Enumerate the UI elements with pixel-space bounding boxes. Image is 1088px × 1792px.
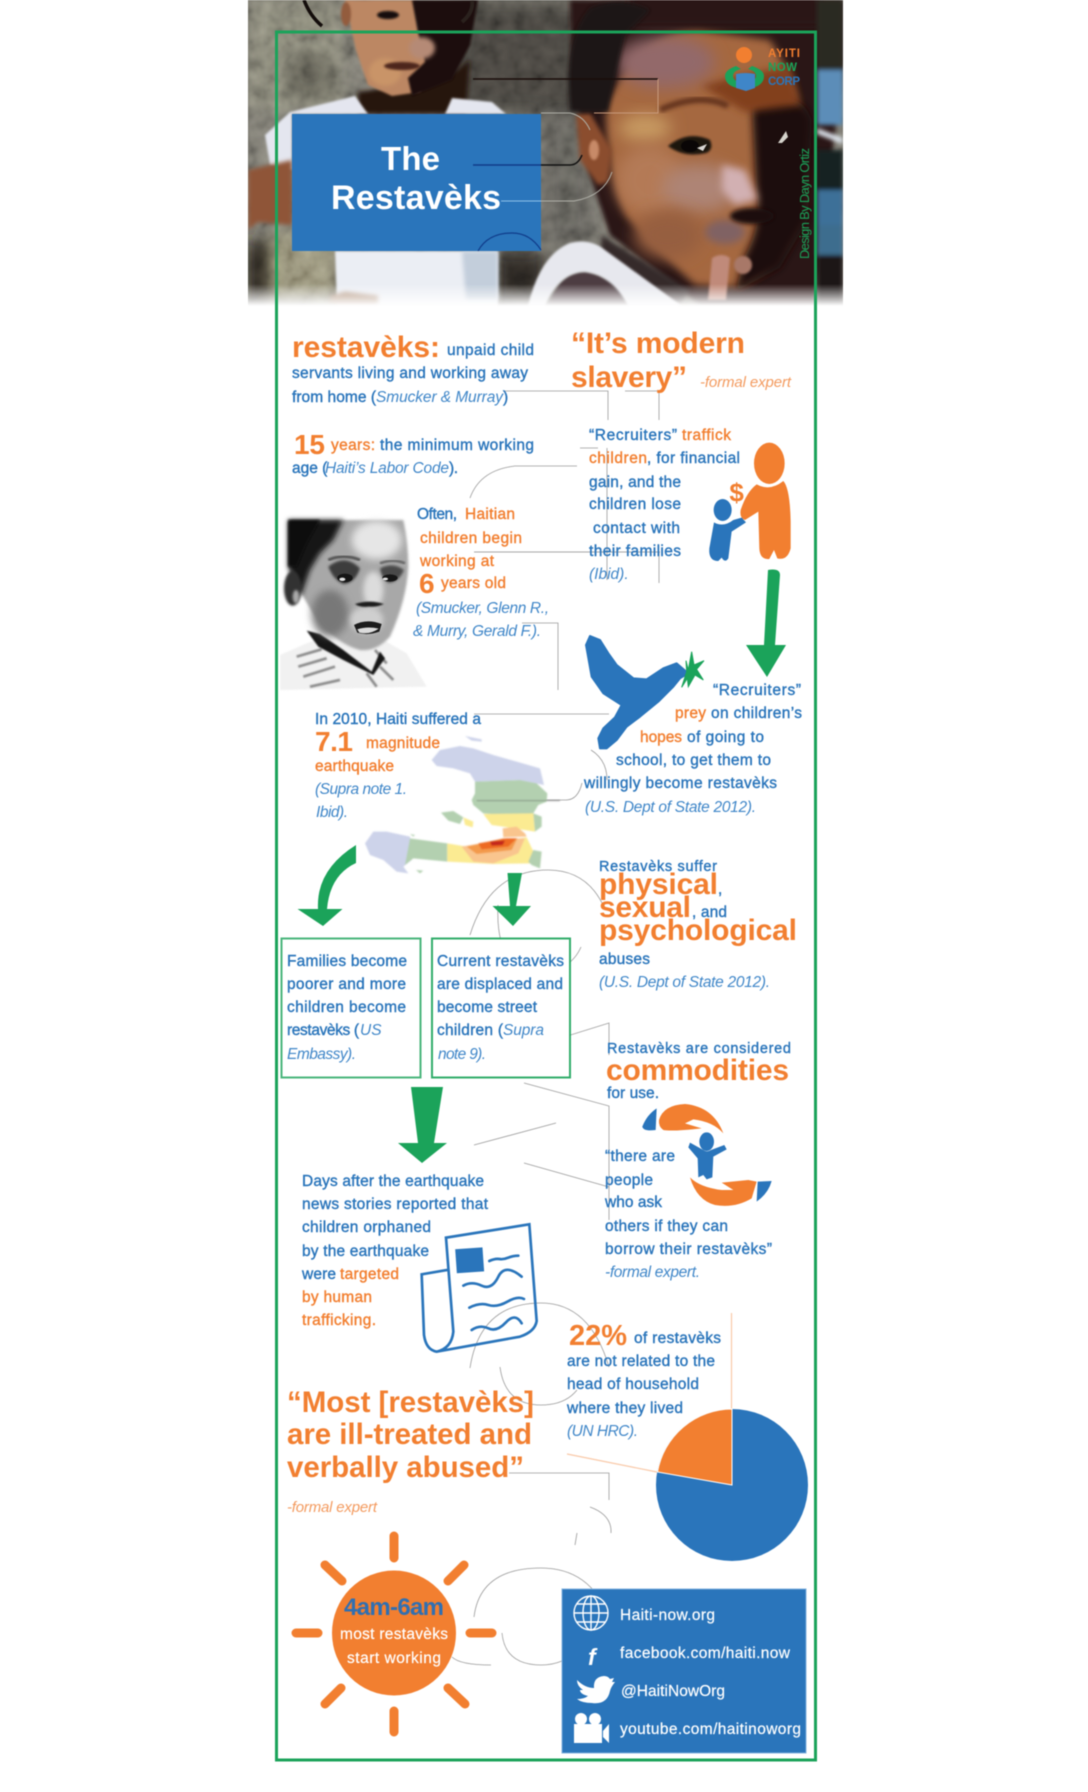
title text [331, 140, 501, 217]
text: abuses: , and [692, 904, 727, 921]
text: days after the earthquake: targeted [340, 1266, 399, 1283]
text: abuses: physical [599, 868, 718, 901]
right child face [568, 0, 843, 306]
stray connector lines [452, 391, 660, 1665]
definition: restavèks [292, 331, 534, 406]
definition: restavèks: ) [503, 389, 508, 406]
icon: video camera [574, 1713, 609, 1743]
text: abuses: sexual [599, 891, 691, 924]
text: days after the earthquake: children orphaned [302, 1219, 431, 1236]
text: 2010 earthquake: (Supra note 1. [315, 781, 407, 798]
title box [292, 114, 541, 251]
text: recruiters traffic children: (Ibid). [589, 566, 629, 583]
box: current restaveks displaced: become street [437, 999, 538, 1016]
text: days after the earthquake: trafficking. [302, 1312, 376, 1329]
text: recruiters traffic children: “Recruiters” [589, 427, 677, 444]
text: recruiters traffic children: traffick [682, 427, 731, 444]
text: 22 percent: of restavèks [634, 1330, 721, 1347]
designer credit: Design By Dayn Ortiz [797, 148, 812, 259]
text: recruiters prey on hopes: willingly become restavèks [583, 775, 777, 792]
quote: modern slavery: slavery” [571, 361, 687, 394]
hero stray lines [473, 79, 658, 201]
left child face [304, 0, 478, 114]
quote: ill-treated: -formal expert [287, 1499, 378, 1516]
contact panel [562, 1589, 806, 1753]
text: children begin working at 6: (Smucker, Glenn R., [416, 600, 549, 617]
stat: 15 years: Haiti’s Labor Code [325, 460, 449, 477]
curved arrow to families box [298, 845, 356, 926]
text: recruiters traffic children: , for financial [647, 450, 740, 467]
text: days after the earthquake: by human [302, 1289, 372, 1306]
logo: Ayiti Now Corp: AYITI [768, 48, 800, 60]
text: days after the earthquake: news stories reported that [302, 1196, 489, 1213]
box: current restaveks displaced: children ( [437, 1022, 504, 1039]
text: abuses: Restavèks suffer [599, 859, 717, 875]
text: 2010 earthquake: earthquake [315, 758, 394, 775]
contact links: youtube.com/haitinoworg [620, 1721, 801, 1738]
definition: restavèks: restavèks: [292, 331, 440, 364]
text: 22 percent: where they lived [566, 1400, 683, 1417]
logo: Ayiti Now Corp: CORP [768, 76, 800, 88]
text: abuses: abuses [599, 951, 650, 968]
quote: modern slavery: -formal expert [700, 374, 792, 391]
box: current restaveks displaced [432, 938, 570, 1078]
text: 2010 earthquake: Ibid). [316, 804, 348, 821]
box: current restaveks displaced: are displaced and [437, 976, 563, 993]
contact links: @HaitiNowOrg [621, 1683, 725, 1700]
quote: ill-treated: “Most [restavèks] [287, 1386, 534, 1419]
box: families become poorer [282, 938, 420, 1078]
text: 2010 earthquake: magnitude [366, 735, 440, 752]
icon: adult paying for child [709, 443, 791, 561]
icon: adult paying for child: $ [729, 478, 744, 508]
pie chart: 22 percent [567, 1313, 808, 1561]
text: commodities: commodities [606, 1054, 789, 1087]
hero photo: two children [248, 0, 843, 306]
text: recruiters prey on hopes: “Recruiters” [713, 682, 801, 699]
sun: working hours [296, 1536, 492, 1732]
quote: modern slavery [571, 327, 792, 394]
text: children begin working at 6: years old [441, 575, 506, 592]
text: days after the earthquake [301, 1173, 489, 1329]
text: children begin working at 6: 6 [419, 568, 435, 599]
stat: 15 years: ). [449, 460, 458, 477]
text: recruiters prey on hopes: hopes [640, 729, 682, 746]
title text: The [381, 140, 440, 177]
text: 2010 earthquake [315, 711, 481, 821]
box: families become poorer: Embassy). [287, 1046, 356, 1063]
box: families become poorer: children become [287, 999, 406, 1016]
text: children begin working at 6: working at [419, 553, 495, 570]
text: 2010 earthquake: 7.1 [315, 726, 353, 757]
text: days after the earthquake: by the earthquake [302, 1243, 429, 1260]
icon: facebook: f [588, 1644, 598, 1670]
stat: 15 years: 15 [294, 429, 325, 460]
text: commodities [606, 1041, 791, 1102]
text: days after the earthquake: Days after the earthquake [302, 1173, 484, 1190]
icon: globe [574, 1596, 608, 1630]
box: current restaveks displaced: note 9). [438, 1046, 486, 1063]
child portrait photo [280, 520, 427, 690]
quote: ill-treated: are ill-treated and [287, 1418, 532, 1451]
text: recruiters prey on hopes: of going to [687, 729, 764, 746]
text: recruiters traffic children: their families [589, 543, 681, 560]
text: recruiters traffic children: children [589, 450, 647, 467]
logo: Ayiti Now Corp [725, 47, 800, 91]
quote: borrow restaveks: “there are [605, 1148, 675, 1165]
text: abuses: (U.S. Dept of State 2012). [599, 974, 770, 991]
quote: borrow restaveks: others if they can [605, 1218, 728, 1235]
quote: borrow restaveks: borrow their restavèks” [605, 1241, 772, 1258]
text: recruiters traffic children: contact with [593, 520, 680, 537]
box: families become poorer: Families become [287, 953, 407, 970]
text: recruiters prey on hopes: school, to get them to [616, 752, 771, 769]
large arrow to news text [398, 1087, 447, 1163]
text: 22 percent: (UN HRC). [567, 1423, 638, 1440]
text: abuses: psychological [599, 914, 797, 947]
icon: newspaper [422, 1224, 537, 1352]
text: children begin working at 6: & Murry, Gerald F.). [413, 623, 541, 640]
outer frame [276, 32, 816, 1760]
text: recruiters traffic children: children lose [589, 496, 681, 513]
contact links: Haiti-now.org [620, 1607, 715, 1624]
text: 2010 earthquake: In 2010, Haiti suffered a [315, 711, 481, 728]
quote: borrow restaveks: people [605, 1172, 653, 1189]
box: current restaveks displaced: Supra [503, 1022, 544, 1039]
infographic: The Restavèks [247, 0, 844, 1762]
text: commodities: Restavèks are considered [607, 1041, 791, 1057]
sun: working hours: most restavèks [340, 1626, 448, 1643]
logo: Ayiti Now Corp: NOW [768, 62, 797, 74]
text: children begin working at 6: Often, [417, 506, 457, 523]
icon: hands passing a child [642, 1104, 772, 1206]
text: recruiters prey on hopes: (U.S. Dept of State 2012). [585, 799, 756, 816]
sun: working hours: start working [347, 1650, 441, 1667]
quote: borrow restaveks: -formal expert. [605, 1264, 700, 1281]
text: recruiters prey on hopes: prey [675, 705, 706, 722]
text: abuses: , [718, 881, 722, 898]
quote: borrow restaveks: who ask [604, 1194, 662, 1211]
contact links: facebook.com/haiti.now [620, 1645, 791, 1662]
definition: restavèks: from home ( [292, 389, 377, 406]
box: families become poorer: US [360, 1022, 382, 1039]
stat: 15 years [292, 429, 534, 477]
shirt collar [551, 272, 620, 304]
text: abuses [599, 859, 797, 991]
text: children begin working at 6: Haitian [465, 506, 515, 523]
box: families become poorer: restavèks ( [287, 1022, 360, 1039]
quote: modern slavery: “It’s modern [571, 327, 745, 360]
background right strip [817, 0, 843, 306]
left child shirt [265, 96, 506, 170]
quote: ill-treated: verbally abused” [287, 1451, 524, 1484]
text: 22 percent: head of household [567, 1376, 699, 1393]
text: recruiters prey on hopes [583, 682, 802, 816]
small arrow to current restaveks box [492, 873, 531, 926]
map of Haiti earthquake intensity [365, 736, 560, 873]
title text: Restavèks [331, 179, 501, 217]
text: 22 percent [566, 1320, 721, 1440]
text: children begin working at 6 [413, 506, 549, 640]
box: families become poorer: poorer and more [287, 976, 406, 993]
text: recruiters prey on hopes: on children’s [711, 705, 802, 722]
definition: restavèks: servants living and working away [292, 365, 528, 382]
icon: twitter bird [577, 1676, 615, 1703]
stat: 15 years: age ( [292, 460, 328, 477]
definition: restavèks: unpaid child [447, 342, 534, 359]
definition: restavèks: Smucker & Murray [376, 389, 504, 406]
quote: borrow restaveks [604, 1148, 772, 1281]
text: 22 percent: are not related to the [567, 1353, 715, 1370]
text: recruiters traffic children: gain, and the [589, 474, 681, 491]
box: current restaveks displaced: Current restavèks [437, 953, 564, 970]
text: recruiters traffic children [589, 427, 740, 583]
quote: ill-treated [287, 1386, 534, 1516]
text: days after the earthquake: were [301, 1266, 336, 1283]
stat: 15 years: the minimum working [380, 437, 534, 454]
text: commodities: for use. [607, 1085, 659, 1102]
stat: 15 years: years: [331, 437, 375, 454]
icon: dove with branch [586, 636, 704, 748]
text: 22 percent: 22% [569, 1320, 627, 1352]
sun: working hours: 4am-6am [344, 1594, 444, 1621]
text: children begin working at 6: children begin [420, 530, 522, 547]
arrow: recruiters to dove [746, 570, 786, 677]
contact links [620, 1607, 801, 1738]
